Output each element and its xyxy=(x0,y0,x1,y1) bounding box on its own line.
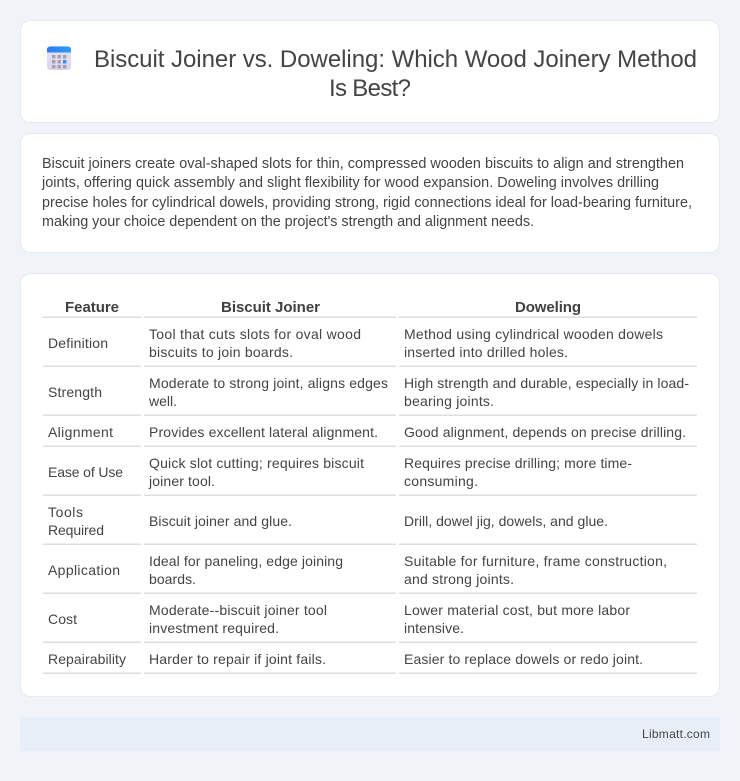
row: cost: Cost xyxy=(48,611,77,627)
row: strength: bearing joints. xyxy=(404,393,494,409)
row: application: Suitable for furniture, frame construction, xyxy=(404,553,667,569)
intro text: making your choice dependent on the project's strength and alignment needs. xyxy=(42,214,534,230)
row: definition: inserted into drilled holes. xyxy=(404,344,568,360)
row: strength: well. xyxy=(148,393,177,409)
table header row: Biscuit Joiner xyxy=(221,299,320,316)
row: repairability: Repairability xyxy=(48,651,126,667)
footer bar xyxy=(20,717,720,751)
row: tools required xyxy=(48,504,608,538)
row: application: Application xyxy=(48,562,120,578)
row: definition: biscuits to join boards. xyxy=(149,344,293,360)
row: repairability: Harder to repair if joint fails. xyxy=(149,651,326,667)
row: application: Ideal for paneling, edge joining xyxy=(149,553,343,569)
intro text: joints, offering quick assembly and slight flexibility for wood expansion. Doweling involves drilling xyxy=(41,175,659,191)
row: tools required: Drill, dowel jig, dowels, and glue. xyxy=(404,513,608,529)
row: ease of use: Requires precise drilling; more time- xyxy=(404,455,632,471)
intro text xyxy=(41,156,692,230)
row: ease of use: consuming. xyxy=(404,473,478,489)
row: alignment: Good alignment, depends on precise drilling. xyxy=(404,424,686,440)
icon: calendar grid xyxy=(47,46,71,70)
row: tools required: Biscuit joiner and glue. xyxy=(149,513,292,529)
title xyxy=(94,46,697,102)
row: definition: Definition xyxy=(48,335,108,351)
row: tools required: Tools xyxy=(48,504,83,520)
row: alignment xyxy=(48,424,686,440)
row: alignment: Alignment xyxy=(48,424,113,440)
table header row: Feature xyxy=(65,299,119,316)
row: cost: intensive. xyxy=(404,620,464,636)
table header row xyxy=(65,299,581,316)
row: ease of use: Quick slot cutting; requires biscuit xyxy=(149,455,364,471)
footer credit: Libmatt.com xyxy=(642,727,710,741)
intro panel xyxy=(20,134,720,252)
row: cost: Lower material cost, but more labor xyxy=(404,602,630,618)
row: ease of use xyxy=(48,455,632,489)
table header row: Doweling xyxy=(515,299,581,316)
row: definition: Method using cylindrical wooden dowels xyxy=(404,326,663,342)
row: cost: investment required. xyxy=(149,620,279,636)
row: repairability: Easier to replace dowels or redo joint. xyxy=(404,651,643,667)
row: cost xyxy=(48,602,630,636)
row: repairability xyxy=(48,651,643,667)
row: strength: Moderate to strong joint, aligns edges xyxy=(149,375,388,391)
row: definition xyxy=(48,326,663,360)
intro text: Biscuit joiners create oval-shaped slots for thin, compressed wooden biscuits to align and strengthen xyxy=(42,156,684,172)
row: alignment: Provides excellent lateral alignment. xyxy=(149,424,378,440)
row: strength xyxy=(48,375,689,409)
row: application xyxy=(48,553,667,587)
row: application: boards. xyxy=(149,571,196,587)
row: strength: Strength xyxy=(48,384,102,400)
intro text: precise holes for cylindrical dowels, providing strong, rigid connections ideal for load-bearing furniture, xyxy=(42,195,692,211)
row: strength: High strength and durable, especially in load- xyxy=(404,375,689,391)
row: ease of use: Ease of Use xyxy=(48,464,123,480)
row: cost: Moderate--biscuit joiner tool xyxy=(149,602,327,618)
row: ease of use: joiner tool. xyxy=(148,473,215,489)
title: Is Best? xyxy=(329,75,411,102)
header panel xyxy=(20,20,720,122)
comparison table panel xyxy=(20,274,720,696)
row: tools required: Required xyxy=(48,522,104,538)
title: Biscuit Joiner vs. Doweling: Which Wood Joinery Method xyxy=(94,46,697,73)
row: application: and strong joints. xyxy=(404,571,514,587)
row: definition: Tool that cuts slots for oval wood xyxy=(149,326,361,342)
